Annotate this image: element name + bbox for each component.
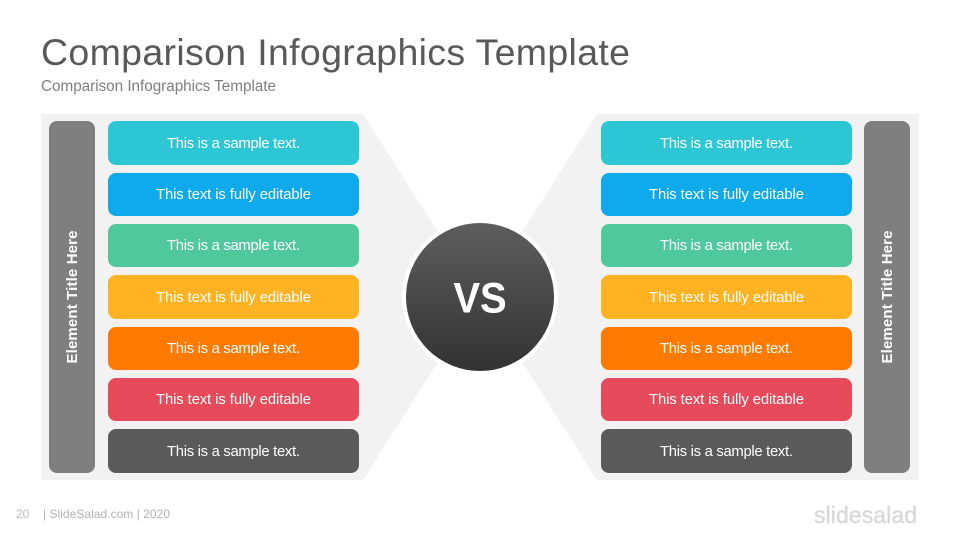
left item 3: This is a sample text. xyxy=(167,238,300,254)
right item 3 xyxy=(601,224,852,267)
left item 5 xyxy=(108,327,359,370)
left item 5: This is a sample text. xyxy=(167,341,300,357)
right item 4: This text is fully editable xyxy=(649,290,804,306)
right item 7 xyxy=(601,429,852,473)
panel: left comparison column xyxy=(41,114,479,480)
subtitle: Comparison Infographics Template xyxy=(41,78,276,95)
right item 5: This is a sample text. xyxy=(660,341,793,357)
title: Comparison Infographics Template xyxy=(41,31,630,73)
right element title bar: Element Title Here xyxy=(879,230,896,364)
right item 6: This text is fully editable xyxy=(649,392,804,408)
right panel background xyxy=(481,114,919,480)
footer site and year: | SlideSalad.com | 2020 xyxy=(43,507,170,521)
VS badge xyxy=(402,219,558,375)
right element title bar xyxy=(864,121,910,473)
left item 7 xyxy=(108,429,359,473)
right item 7: This is a sample text. xyxy=(660,444,793,460)
right item 1 xyxy=(601,121,852,165)
left item 4: This text is fully editable xyxy=(156,290,311,306)
panel: right comparison column xyxy=(481,114,919,480)
right item 6 xyxy=(601,378,852,421)
left element title bar xyxy=(49,121,95,473)
right item 4 xyxy=(601,275,852,319)
left item 1 xyxy=(108,121,359,165)
left item 1: This is a sample text. xyxy=(167,136,300,152)
left item 6 xyxy=(108,378,359,421)
right item 2 xyxy=(601,173,852,216)
VS badge: VS xyxy=(453,274,507,322)
left item 6: This text is fully editable xyxy=(156,392,311,408)
left item 4 xyxy=(108,275,359,319)
brand logo wordmark: slidesalad xyxy=(814,502,917,528)
right item 5 xyxy=(601,327,852,370)
left item 2: This text is fully editable xyxy=(156,187,311,203)
left item 2 xyxy=(108,173,359,216)
right item 1: This is a sample text. xyxy=(660,136,793,152)
left item 3 xyxy=(108,224,359,267)
left item 7: This is a sample text. xyxy=(167,444,300,460)
left panel background xyxy=(41,114,479,480)
right item 2: This text is fully editable xyxy=(649,187,804,203)
left element title bar: Element Title Here xyxy=(64,230,81,364)
footer page number: 20 xyxy=(16,507,30,521)
right item 3: This is a sample text. xyxy=(660,238,793,254)
